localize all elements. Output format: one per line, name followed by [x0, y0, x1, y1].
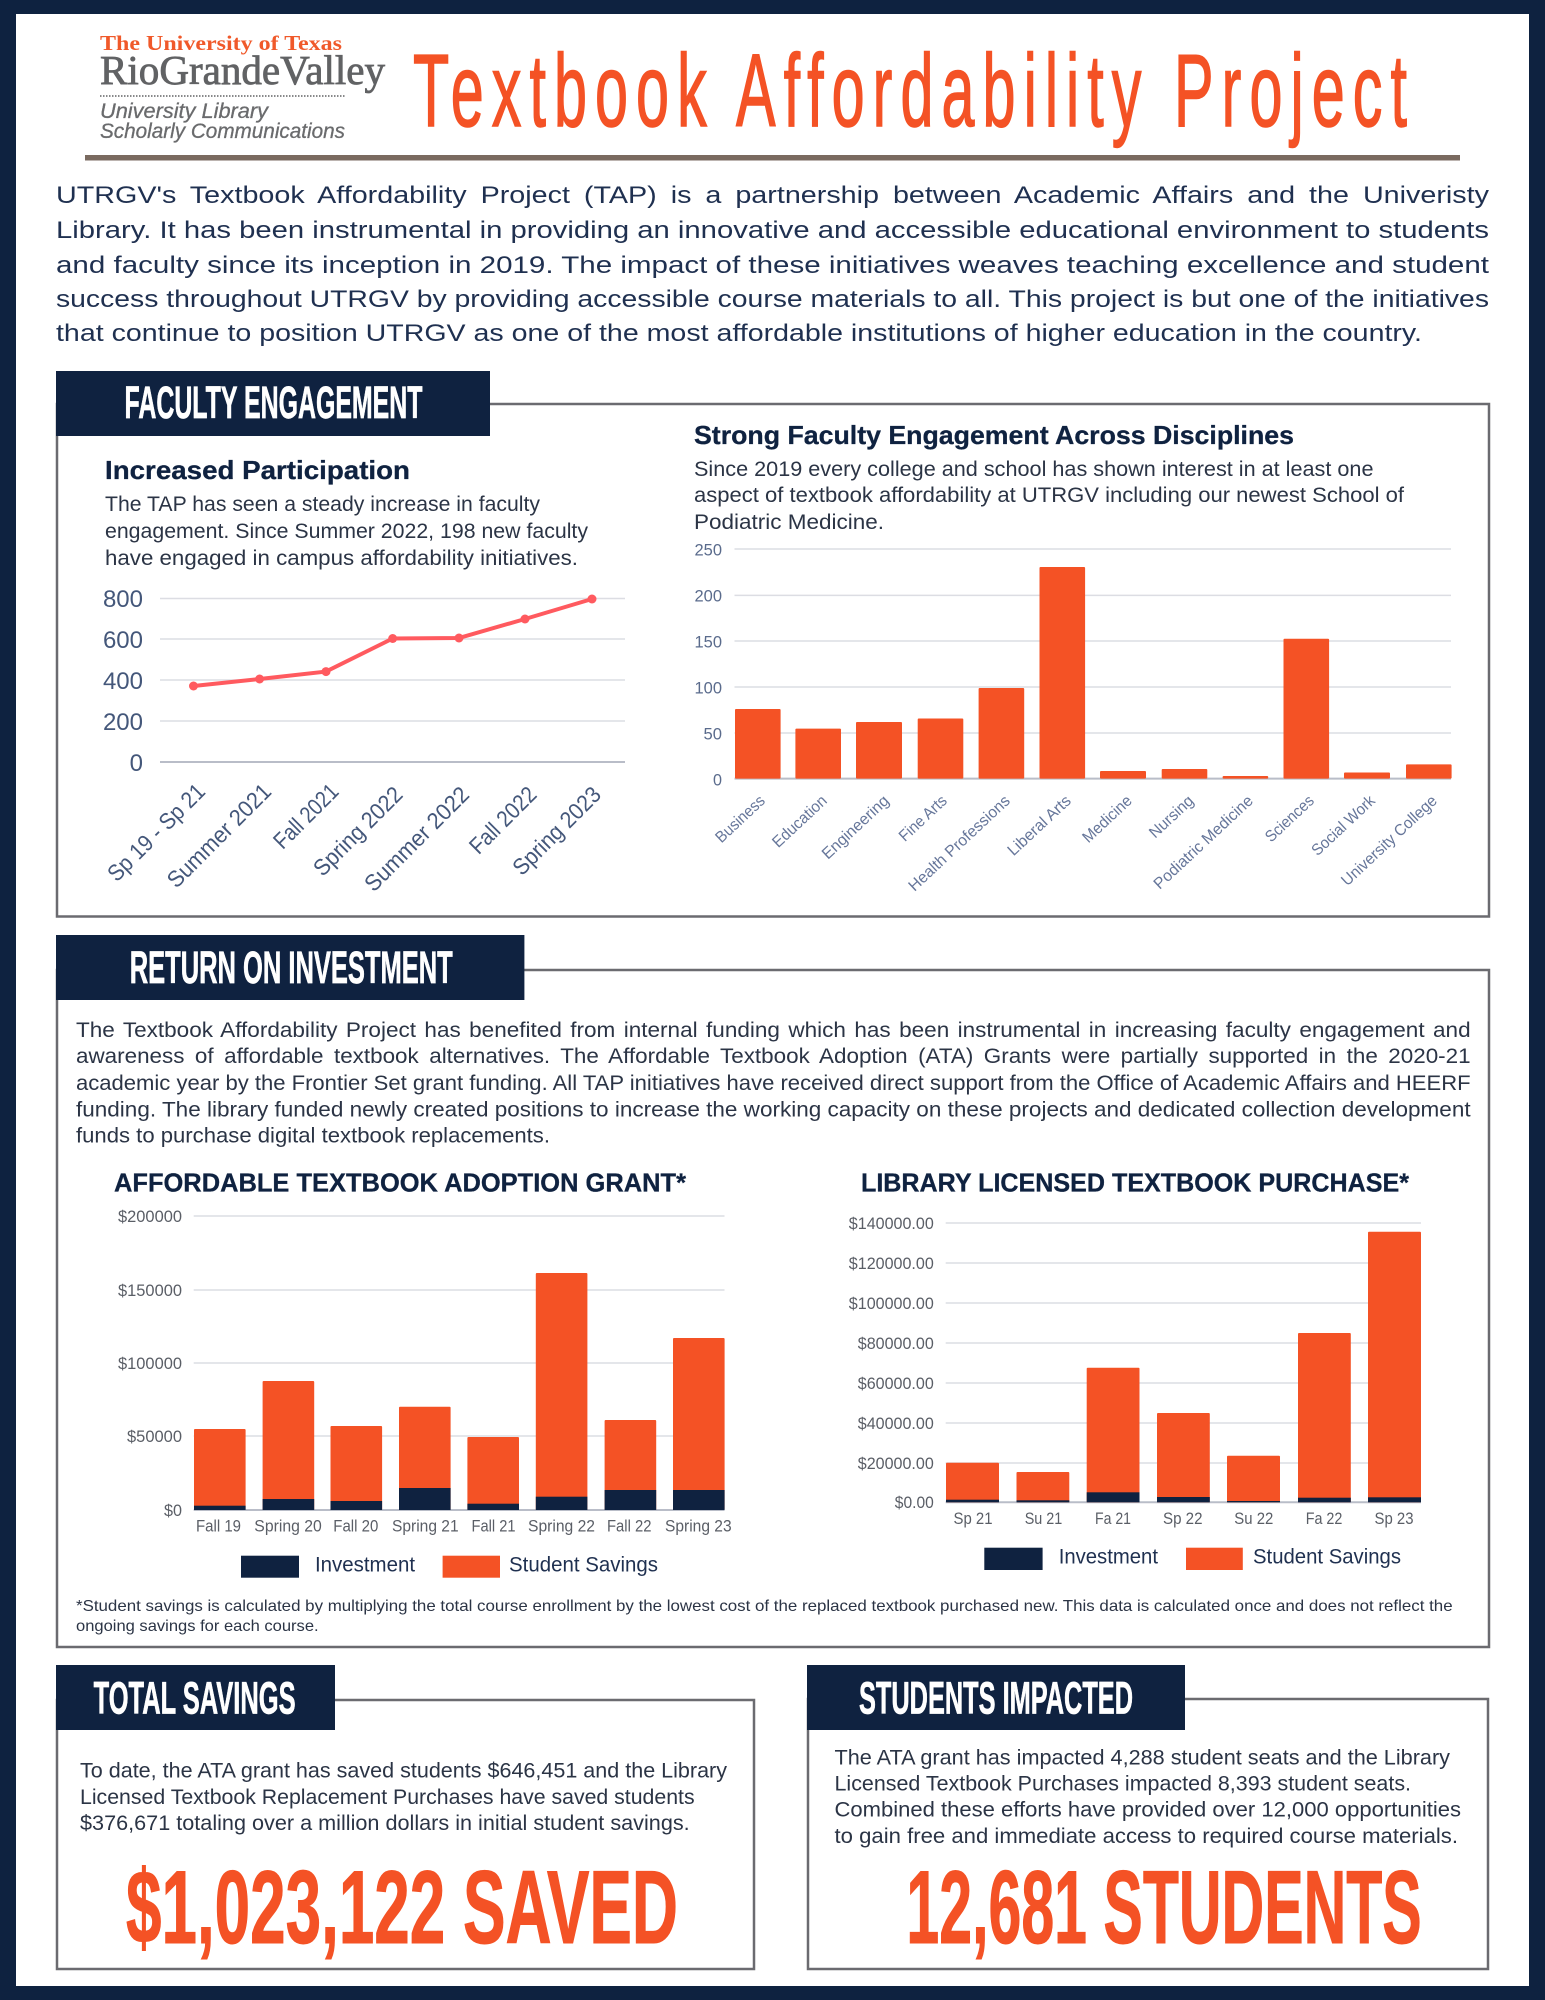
bar chart: engagement by discipline: University College — [1338, 792, 1441, 889]
stacked bar chart: ATA grant: Fall 19 — [196, 1517, 241, 1536]
text block: increased participation — [105, 455, 588, 570]
logo: UTRGV University Library: University Library — [100, 100, 270, 123]
bar chart: engagement by discipline: 150 — [694, 632, 722, 652]
line chart: faculty participation: 0 — [130, 750, 143, 777]
text block: students impacted description: to gain free and immediate access to required course materials. — [834, 1825, 1458, 1848]
legend: ATA grant — [241, 1554, 658, 1578]
chart heading: library licensed textbook purchase: LIBRARY LICENSED TEXTBOOK PURCHASE* — [861, 1168, 1410, 1198]
intro paragraph: success throughout UTRGV by providing accessible course materials to all. This project is but one of the initiatives — [56, 286, 1489, 313]
text block: return on investment description: funds to purchase digital textbook replacements. — [76, 1125, 550, 1148]
section heading: total savings: TOTAL SAVINGS — [94, 1672, 296, 1723]
logo: UTRGV University Library: The University of Texas — [100, 31, 342, 55]
bar chart: engagement by discipline: 0 — [713, 770, 722, 790]
text block: students impacted description: Licensed Textbook Purchases impacted 8,393 student seats. — [834, 1773, 1411, 1796]
bar chart: engagement by discipline: Sciences — [1262, 792, 1318, 846]
stacked bar chart: library licensed purchases: $80000.00 — [858, 1334, 934, 1353]
legend: ATA grant: Student Savings — [509, 1554, 658, 1577]
line chart: faculty participation: 600 — [103, 627, 143, 654]
text block: increased participation: The TAP has seen a steady increase in faculty — [105, 493, 541, 516]
chart heading: affordable textbook adoption grant: AFFORDABLE TEXTBOOK ADOPTION GRANT* — [114, 1168, 687, 1198]
intro paragraph: Library. It has been instrumental in providing an innovative and accessible educational environment to students — [56, 217, 1489, 244]
panel: return on investment — [56, 935, 1489, 1647]
stacked bar chart: library licensed purchases: $120000.00 — [849, 1254, 934, 1273]
text block: increased participation: Increased Participation — [105, 455, 410, 485]
stacked bar chart: library licensed purchases: Sp 23 — [1374, 1509, 1414, 1528]
logo: UTRGV University Library: RioGrandeValley — [100, 47, 385, 93]
stacked bar chart: ATA grant: Fall 21 — [472, 1517, 516, 1536]
stacked bar chart: library licensed purchases — [849, 1214, 1421, 1528]
text block: return on investment description — [76, 1019, 1471, 1148]
line chart: faculty participation: 200 — [103, 709, 143, 736]
stacked bar chart: library licensed purchases: Fa 22 — [1306, 1509, 1342, 1528]
stacked bar chart: ATA grant: $0 — [164, 1501, 182, 1520]
bar chart: engagement by discipline: Medicine — [1080, 792, 1136, 847]
line chart: faculty participation — [102, 586, 625, 896]
section heading: faculty engagement: FACULTY ENGAGEMENT — [124, 377, 422, 428]
text block: return on investment description: funding. The library funded newly created positions to increase the working capacity on these projects and dedicated collection development — [76, 1099, 1471, 1122]
line chart: faculty participation: Spring 2023 — [507, 781, 606, 880]
big number: total saved: $1,023,122 SAVED — [126, 1850, 678, 1966]
section heading: return on investment: RETURN ON INVESTMENT — [130, 942, 453, 993]
header rule — [85, 155, 1460, 160]
bar chart: engagement by discipline: Education — [769, 792, 831, 851]
text block: strong faculty engagement — [694, 420, 1404, 534]
stacked bar chart: library licensed purchases: $60000.00 — [858, 1374, 934, 1393]
stacked bar chart: library licensed purchases: Fa 21 — [1095, 1509, 1131, 1528]
line chart: faculty participation: Summer 2022 — [359, 781, 474, 896]
footnote: *Student savings is calculated by multiplying the total course enrollment by the lowest cost of the replaced textbook purchased new. This data is calculated once and does not reflect the — [76, 1598, 1453, 1615]
stacked bar chart: ATA grant — [118, 1207, 732, 1536]
bar chart: engagement by discipline: Business — [713, 792, 769, 847]
text block: total savings description — [80, 1760, 728, 1835]
intro paragraph: UTRGV's Textbook Affordability Project (TAP) is a partnership between Academic Affairs and the Univeristy — [56, 182, 1489, 209]
text block: increased participation: engagement. Since Summer 2022, 198 new faculty — [105, 520, 588, 543]
bar chart: engagement by discipline: 250 — [694, 540, 722, 560]
stacked bar chart: ATA grant: Spring 23 — [665, 1517, 732, 1536]
section heading: return on investment — [56, 935, 524, 1000]
bar chart: engagement by discipline: Podiatric Medicine — [1151, 792, 1257, 893]
stacked bar chart: ATA grant: Spring 21 — [392, 1517, 459, 1536]
section heading: students impacted — [807, 1665, 1185, 1730]
stacked bar chart: library licensed purchases: Su 21 — [1025, 1509, 1062, 1528]
footnote: ongoing savings for each course. — [76, 1618, 319, 1635]
bar chart: engagement by discipline: Engineering — [819, 792, 893, 863]
panel: faculty engagement — [56, 371, 1489, 916]
text block: students impacted description: Combined these efforts have provided over 12,000 opportunities — [834, 1799, 1461, 1822]
intro paragraph — [56, 182, 1489, 347]
intro paragraph: and faculty since its inception in 2019. The impact of these initiatives weaves teaching excellence and student — [56, 252, 1489, 279]
logo: UTRGV University Library: Scholarly Communications — [100, 120, 345, 143]
stacked bar chart: library licensed purchases: $0.00 — [895, 1493, 934, 1512]
panel: students impacted — [807, 1665, 1488, 1969]
stacked bar chart: library licensed purchases: $20000.00 — [858, 1454, 934, 1473]
stacked bar chart: library licensed purchases: Su 22 — [1234, 1509, 1273, 1528]
stacked bar chart: ATA grant: Fall 20 — [333, 1517, 378, 1536]
legend: library licensed purchases: Investment — [1059, 1546, 1158, 1569]
section heading: faculty engagement — [56, 371, 490, 436]
stacked bar chart: ATA grant: $50000 — [127, 1427, 182, 1446]
stacked bar chart: ATA grant: Fall 22 — [607, 1517, 652, 1536]
text block: total savings description: Licensed Textbook Replacement Purchases have saved students — [80, 1786, 695, 1809]
stacked bar chart: ATA grant: $150000 — [118, 1281, 182, 1300]
footnote — [76, 1598, 1453, 1635]
text block: return on investment description: The Textbook Affordability Project has benefited from internal funding which has been instrumental in increasing faculty engagement and — [76, 1019, 1471, 1042]
text block: strong faculty engagement: Since 2019 every college and school has shown interest in at least one — [694, 458, 1374, 481]
section heading: students impacted: STUDENTS IMPACTED — [859, 1672, 1133, 1723]
text block: return on investment description: awareness of affordable textbook alternatives. The Affordable Textbook Adoption (ATA) Grants were partially supported in the 2020-21 — [76, 1045, 1471, 1068]
stacked bar chart: library licensed purchases: $40000.00 — [858, 1414, 934, 1433]
text block: strong faculty engagement: Podiatric Medicine. — [694, 511, 884, 534]
text block: students impacted description — [834, 1746, 1461, 1848]
bar chart: engagement by discipline: Nursing — [1146, 792, 1197, 842]
stacked bar chart: ATA grant: $200000 — [118, 1207, 182, 1226]
bar chart: engagement by discipline: Social Work — [1309, 792, 1379, 859]
bar chart: engagement by discipline: Fine Arts — [896, 792, 951, 845]
stacked bar chart: library licensed purchases: $140000.00 — [849, 1214, 934, 1233]
stacked bar chart: ATA grant: Spring 22 — [528, 1517, 595, 1536]
text block: strong faculty engagement: aspect of textbook affordability at UTRGV including our newest School of — [694, 484, 1404, 507]
stacked bar chart: ATA grant: $100000 — [118, 1354, 182, 1373]
bar chart: engagement by discipline: Health Professions — [906, 792, 1014, 895]
line chart: faculty participation: 400 — [103, 668, 143, 695]
bar chart: engagement by discipline: 200 — [694, 586, 722, 606]
stacked bar chart: library licensed purchases: $100000.00 — [849, 1294, 934, 1313]
legend: library licensed purchases: Student Savings — [1253, 1546, 1401, 1569]
line chart: faculty participation: Spring 2022 — [308, 781, 408, 881]
text block: return on investment description: academic year by the Frontier Set grant funding. All TAP initiatives have received direct support from the Office of Academic Affairs and HEERF — [76, 1072, 1471, 1095]
line chart: faculty participation: 800 — [103, 586, 143, 613]
text block: total savings description: To date, the ATA grant has saved students $646,451 and the Library — [80, 1760, 728, 1783]
bar chart: engagement by discipline — [694, 540, 1452, 895]
stacked bar chart: ATA grant: Spring 20 — [254, 1517, 322, 1536]
bar chart: engagement by discipline: Liberal Arts — [1005, 792, 1075, 859]
text block: strong faculty engagement: Strong Faculty Engagement Across Disciplines — [694, 420, 1294, 450]
panel: total savings — [56, 1665, 754, 1969]
text block: students impacted description: The ATA grant has impacted 4,288 student seats and the Library — [834, 1746, 1451, 1769]
section heading: total savings — [56, 1665, 335, 1730]
line chart: faculty participation: Summer 2021 — [162, 778, 276, 893]
bar chart: engagement by discipline: 100 — [694, 678, 722, 698]
stacked bar chart: library licensed purchases: Sp 21 — [954, 1509, 992, 1528]
line chart: faculty participation: Fall 2022 — [464, 781, 542, 859]
text block: increased participation: have engaged in campus affordability initiatives. — [105, 547, 578, 570]
legend: ATA grant: Investment — [315, 1554, 415, 1577]
stacked bar chart: library licensed purchases: Sp 22 — [1163, 1509, 1202, 1528]
legend: library licensed purchases — [984, 1546, 1401, 1570]
intro paragraph: that continue to position UTRGV as one of the most affordable institutions of higher education in the country. — [56, 320, 1422, 347]
line chart: faculty participation: Sp 19 - Sp 21 — [102, 778, 210, 886]
logo: UTRGV University Library — [100, 31, 385, 143]
bar chart: engagement by discipline: 50 — [704, 724, 722, 744]
line chart: faculty participation: Fall 2021 — [268, 778, 344, 854]
text block: total savings description: $376,671 totaling over a million dollars in initial student savings. — [80, 1812, 690, 1835]
